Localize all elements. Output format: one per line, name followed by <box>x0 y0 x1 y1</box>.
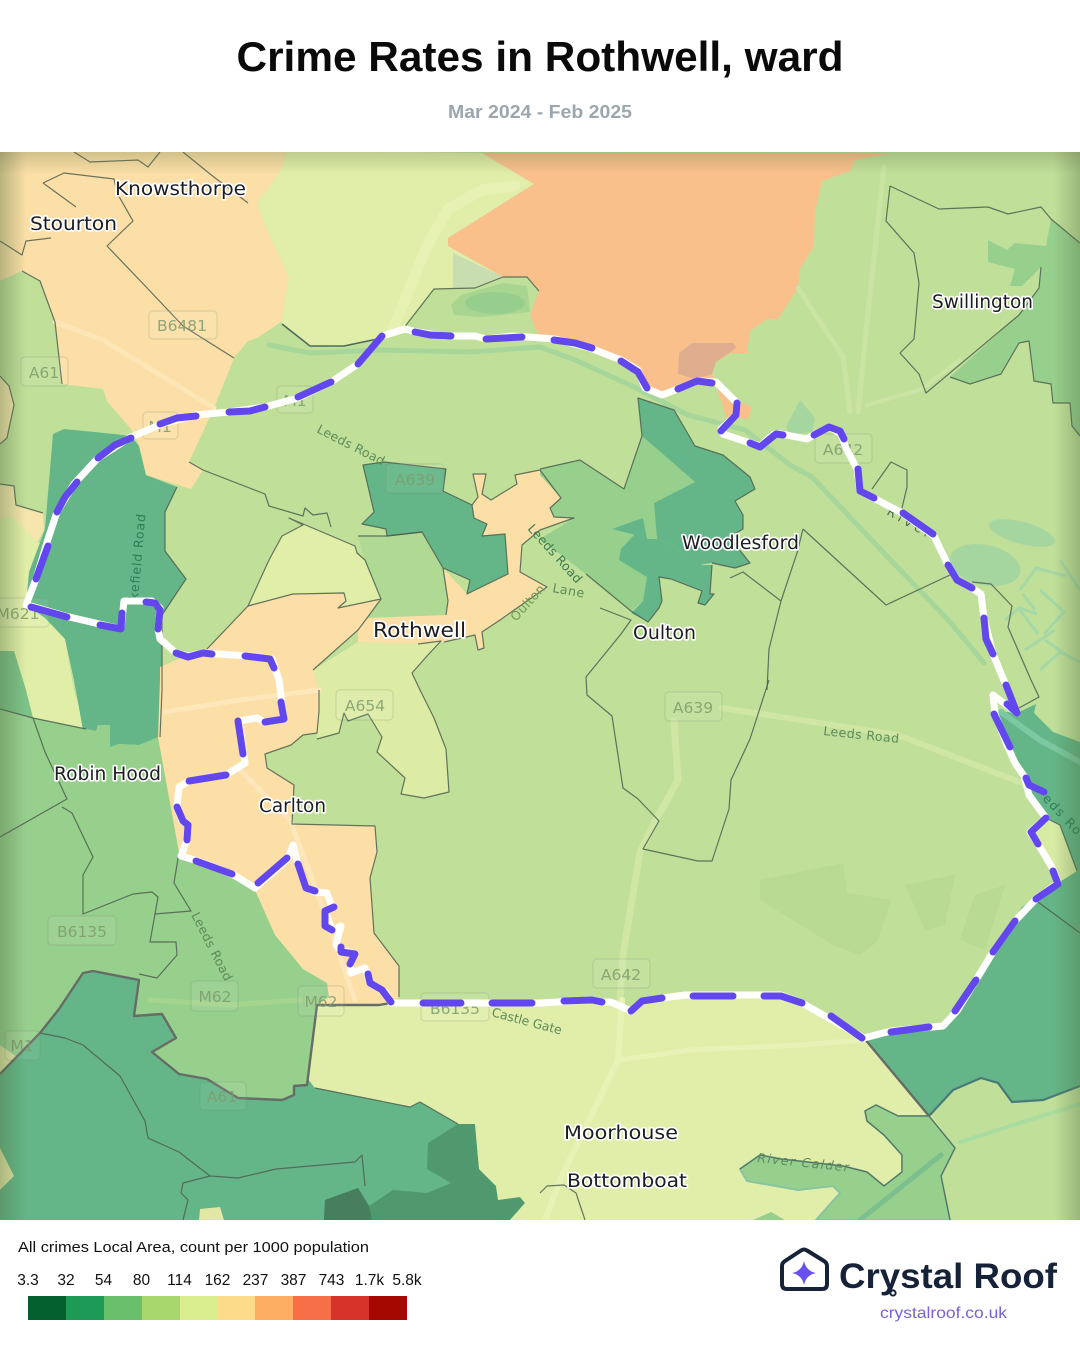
region: west beige fragments <box>0 376 44 543</box>
legend tick values: 80 <box>133 1272 150 1289</box>
region: Carlton beige area <box>158 593 399 1005</box>
legend tick values: 114 <box>167 1272 192 1289</box>
region: north green blob <box>451 283 530 317</box>
road name labels: Leeds Road <box>823 723 900 746</box>
road name labels: kefield Road <box>126 513 148 600</box>
region: north orange area <box>448 153 891 419</box>
region: east pale strip <box>1036 820 1077 881</box>
legend tick values: 162 <box>205 1272 230 1289</box>
wordmark key detail <box>890 1290 896 1296</box>
place names: Stourton <box>30 214 117 235</box>
road number badges: B6481 <box>157 317 207 335</box>
legend tick values: 54 <box>95 1272 112 1289</box>
wordmark: Crystal Roof <box>839 1257 1057 1296</box>
road number badges: A642 <box>601 966 641 984</box>
road name labels: Leeds Road <box>525 521 585 586</box>
road name labels: Leeds Road <box>315 421 387 468</box>
region: north-west beige area <box>0 150 289 489</box>
legend tick values: 237 <box>243 1272 268 1289</box>
map edge vignette <box>0 152 1080 1220</box>
region: pale estate north of Rothwell <box>250 524 380 607</box>
region: river Calder green <box>740 1105 955 1220</box>
legend tick values: 387 <box>281 1272 306 1289</box>
region: far-west mid green <box>0 651 33 718</box>
road name labels <box>126 421 1080 1175</box>
road number badges: M1 <box>148 418 172 436</box>
ponds and estates <box>465 292 1080 670</box>
road number badges: B6135 <box>57 923 107 941</box>
place names <box>30 179 1033 1192</box>
subtitle: date range: Mar 2024 - Feb 2025 <box>448 102 632 122</box>
place names: Rothwell <box>373 618 466 642</box>
roads and waterways <box>55 167 1080 1220</box>
road number badges: M1 <box>283 392 307 410</box>
region: muted patch <box>453 253 503 288</box>
place names: Robin Hood <box>54 764 161 785</box>
road name labels: River Calder <box>757 1150 851 1175</box>
road name labels: Leeds Road <box>188 910 236 983</box>
place names: Carlton <box>259 796 326 817</box>
ward boundary: purple dashes <box>31 332 1058 1038</box>
region: north pale area <box>257 150 534 346</box>
road number badges <box>0 311 872 1110</box>
road number badges: A639 <box>673 699 713 717</box>
region: south-west dark green <box>0 971 525 1220</box>
region: Moorhouse pale area <box>308 995 955 1220</box>
road number badges: M62 <box>198 988 232 1006</box>
place names: Woodlesford <box>682 533 799 554</box>
region: Woodlesford dark green <box>638 398 755 568</box>
road number badges: M1 <box>10 1037 34 1055</box>
road name labels: Castle Gate <box>490 1004 564 1038</box>
region: north-east green area <box>950 219 1080 436</box>
road number badges: A61 <box>29 364 59 382</box>
road name labels: Lane <box>551 580 586 601</box>
region: river Calder small patch <box>753 1212 785 1220</box>
region: south darker green <box>369 1124 525 1220</box>
region: pale area near A654 <box>313 641 449 798</box>
region: south darkest green <box>324 1188 372 1220</box>
place names: Bottomboat <box>567 1171 687 1192</box>
region: Rothwell north green patch <box>358 532 448 618</box>
legend tick values <box>17 1272 422 1289</box>
region: Wakefield Road dark green <box>26 429 186 747</box>
region: east dark green strip <box>996 704 1080 871</box>
logo: Crystal Roof <box>782 1250 1057 1296</box>
road number badges: M62 <box>304 993 338 1011</box>
region: A639 dark green <box>362 462 508 594</box>
legend tick values: 5.8k <box>392 1272 422 1289</box>
road number badges: A61 <box>207 1088 237 1106</box>
region: south-west pale strip <box>0 515 86 729</box>
place names: Knowsthorpe <box>115 179 246 200</box>
title: Crime Rates in Rothwell, ward <box>236 33 843 80</box>
boundary lines <box>0 152 1080 1220</box>
road number badges: B6135 <box>430 1000 480 1018</box>
legend colour scale <box>28 1296 407 1320</box>
icon: house outline with star <box>782 1250 827 1289</box>
legend tick values: 743 <box>319 1272 344 1289</box>
region: south-east dark green <box>864 871 1080 1116</box>
place names: Oulton <box>633 623 696 644</box>
region: west lower mid green <box>0 709 329 1100</box>
region: Oulton dark green <box>612 518 714 622</box>
legend tick values: 1.7k <box>355 1272 384 1289</box>
road number badges: A639 <box>395 471 435 489</box>
region: orange muted patch <box>678 343 736 379</box>
place names: Swillington <box>932 292 1033 313</box>
legend caption: All crimes Local Area, count per 1000 population <box>18 1239 369 1256</box>
legend tick values: 32 <box>57 1272 75 1289</box>
place names: Moorhouse <box>564 1123 678 1144</box>
field tint patches <box>760 863 1005 955</box>
ward boundary: white casing <box>26 329 1058 1038</box>
choropleth map <box>0 150 1080 1220</box>
region: Rothwell beige area <box>358 470 574 650</box>
region: Oulton mid green <box>540 436 695 611</box>
road number badges: A642 <box>823 441 863 459</box>
website link text: crystalroof.co.uk <box>880 1305 1008 1322</box>
road name labels: Oulton <box>507 581 548 624</box>
road name labels: River <box>884 504 934 541</box>
region: small corner fragments <box>0 1045 224 1220</box>
road number badges: A654 <box>345 697 385 715</box>
legend tick values: 3.3 <box>17 1272 39 1289</box>
